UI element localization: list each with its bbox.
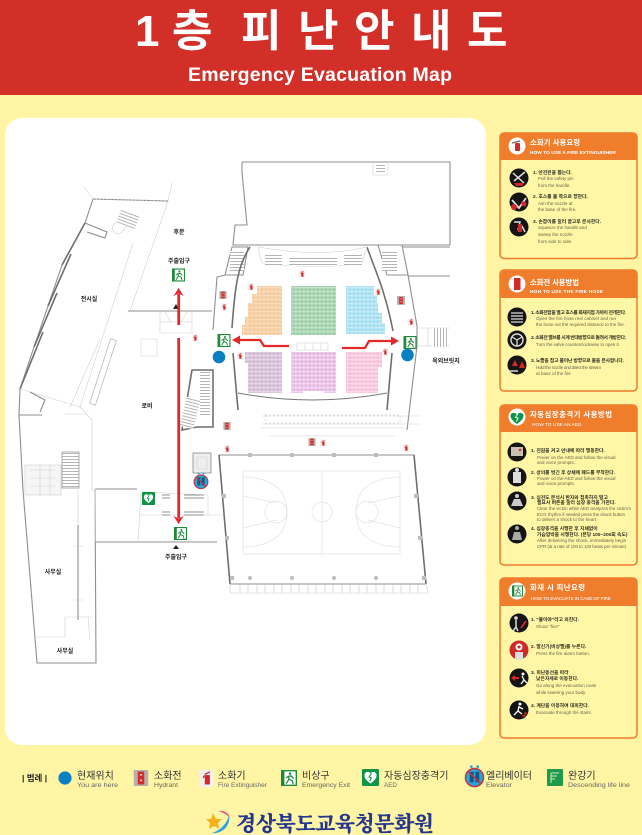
legend: emergency exit: Emergency Exit: [302, 783, 350, 789]
heading: 소화기 사용요령: [530, 138, 580, 147]
label: lobby: 로비: [141, 402, 153, 410]
steps text: Aim the nozzle at: [538, 201, 573, 206]
steps text: ECG rhythm if needed press the shock button: [537, 512, 625, 517]
legend: AED: [362, 769, 448, 789]
steps text: 1. 안전핀을 뽑는다.: [533, 169, 572, 176]
legend: [22, 765, 631, 789]
label: exhibition hall: 전시실: [81, 295, 97, 303]
seat block A: [242, 286, 282, 335]
label: office 2: 사무실: [57, 647, 73, 655]
elevator marker: [194, 472, 208, 489]
evacuation arrow: to rear entrance: [174, 288, 184, 325]
step icons: [510, 168, 528, 236]
legend: extinguisher: 소화기: [218, 770, 246, 782]
seat block D: [245, 352, 282, 393]
title: 1층 피난안내도: [135, 7, 507, 56]
legend: hydrant: Hydrant: [154, 783, 178, 789]
steps text: 2. 호스를 불 쪽으로 향한다.: [533, 193, 588, 200]
AED marker: [142, 492, 155, 505]
steps text: 1. 전원을 켜고 안내에 따라 행동한다.: [531, 447, 605, 454]
steps text: Hold the nozzle and direct the stream: [536, 365, 601, 370]
hydrant markers: [219, 291, 405, 446]
legend: extinguisher: Fire Extinguisher: [218, 783, 267, 789]
subheading: HOW TO EVACUATE IN CASE OF FIRE: [531, 596, 611, 602]
steps text: 낮은자세로 이동한다.: [536, 675, 578, 682]
icon: exit person: [508, 582, 526, 600]
label: main entrance top: 주출입구: [168, 257, 191, 265]
steps text: [533, 169, 601, 244]
outdoor bridge: [418, 328, 460, 365]
label: main entrance bottom: 주출입구: [165, 553, 188, 561]
steps text: 3. 피난동선을 따라: [531, 669, 569, 676]
heading: 소화전 사용방법: [530, 278, 579, 287]
stage front row: [260, 428, 405, 436]
legend: hydrant: 소화전: [154, 770, 182, 782]
panel: fire hose: [500, 270, 637, 391]
steps text: 1. "불이야"라고 외친다.: [531, 616, 579, 623]
steps text: from the handle.: [538, 183, 571, 188]
legend: elevator: Elevator: [486, 783, 512, 789]
steps text: Press the fire alarm button.: [536, 651, 590, 656]
heading: 자동심장충격기 사용방법: [530, 410, 612, 419]
legend: you are here: [58, 769, 119, 789]
you are here: right: [401, 349, 414, 361]
panel: AED: [500, 405, 637, 565]
you are here: left: [213, 351, 225, 363]
evacuation arrow: left exit: [232, 336, 289, 346]
steps text: at base of the fire: [536, 371, 571, 376]
label: back gate: 후문: [173, 228, 185, 236]
steps text: [531, 309, 626, 376]
panel: floor plan: [5, 118, 486, 745]
steps text: CPR (at a rate of 100 to 120 beats per minute): [537, 544, 626, 549]
steps text: Go along the evacuation route: [536, 683, 597, 688]
steps text: Squeeze the handle and: [538, 225, 587, 230]
legend title: | 범례 |: [22, 773, 47, 783]
steps text: 필요시 버튼을 눌러 심장 충격을 가한다.: [537, 499, 616, 506]
legend: descending life line: 완강기: [568, 770, 596, 782]
steps text: [531, 447, 632, 549]
legend: elevator: [465, 765, 532, 789]
legend: emergency exit: 비상구: [302, 770, 330, 782]
heading: 화재 시 피난요령: [530, 583, 585, 592]
steps text: 2. 발신기(비상벨)를 누른다.: [531, 643, 586, 650]
steps text: Turn the valve counterclockwise to open it.: [536, 342, 620, 347]
subheading: HOW TO USE A FIRE EXTINGUISHER: [530, 150, 617, 156]
panel: fire extinguisher: [500, 133, 637, 258]
legend: descending life line: Descending life line: [568, 783, 631, 789]
header banner: [0, 0, 642, 95]
seat block B: [291, 286, 336, 335]
logo mark: [206, 811, 230, 833]
steps text: After delivering the shock, immediately begin: [537, 538, 627, 543]
legend: you are here: You are here: [77, 783, 119, 789]
legend: emergency exit: [281, 770, 350, 789]
legend: elevator: 엘리베이터: [486, 769, 532, 782]
subheading: HOW TO USE AN AED: [532, 422, 582, 428]
legend: you are here: 현재위치: [77, 769, 114, 782]
exit sign: left: [218, 334, 230, 347]
seat block E: [291, 352, 336, 393]
steps text: the base of the fire.: [538, 207, 577, 212]
legend: AED: 자동심장충격기: [384, 769, 448, 782]
steps text: 3. 손잡이를 눌러 골고루 분사한다.: [533, 218, 601, 225]
steps text: Clear the victim while AED analyzes the victim's: [537, 506, 632, 511]
steps text: 1. 소화전함을 열고 호스를 화재지점 가까이 전개한다.: [531, 309, 626, 316]
steps text: 3. 심전도 분석시 환자와 접촉하지 말고: [531, 494, 608, 501]
exit sign: right: [404, 336, 416, 349]
extinguisher markers: [192, 270, 414, 453]
steps text: sweep the nozzle: [538, 232, 573, 237]
steps text: Power on the AED and follow the visual: [537, 455, 616, 460]
steps text: from side to side.: [538, 239, 572, 244]
steps text: and voice prompts.: [537, 460, 575, 465]
label: outdoor bridge: 옥외브릿지: [432, 357, 460, 365]
label: office 1: 사무실: [45, 568, 61, 576]
steps text: [531, 616, 597, 715]
steps text: 4. 심장충격을 시행한 후 지체없이: [531, 525, 598, 532]
step icons: [510, 614, 528, 720]
subtitle: Emergency Evacuation Map: [188, 64, 452, 86]
legend: AED: AED: [384, 783, 398, 789]
steps text: Open the fire hose reel cabinet and run: [536, 316, 616, 321]
evacuation arrow: right exit: [342, 336, 399, 348]
step icons: [508, 442, 526, 544]
legend: hydrant: [134, 770, 182, 789]
steps text: while lowering your body.: [536, 690, 586, 695]
steps text: 4. 계단을 이용하여 대피한다.: [531, 702, 589, 709]
balcony seats: [265, 255, 362, 266]
icon: AED heart: [508, 408, 526, 426]
seat block F: [346, 352, 382, 393]
steps text: 가슴압박을 시행한다. (분당 100~200회 속도): [537, 531, 628, 538]
exhibition wing: [19, 183, 172, 490]
seat block C: [346, 286, 385, 334]
icon: extinguisher: [508, 138, 526, 154]
steps text: 2. 소화전 밸브를 시계 반대방향으로 돌려서 개방한다.: [531, 334, 626, 341]
office wing: [19, 415, 96, 663]
auditorium: [213, 162, 450, 430]
steps text: Evacuate through the stairs.: [536, 710, 592, 715]
step icons: [508, 308, 526, 374]
steps text: Power on the AED and follow the visual: [537, 476, 616, 481]
legend: extinguisher: [200, 770, 267, 789]
steps text: 3. 노즐을 잡고 불이난 방향으로 물을 분사합니다.: [531, 357, 624, 364]
steps text: Shout "fire!": [536, 624, 560, 629]
evacuation arrow: to front entrance: [174, 338, 184, 524]
steps text: the hose out the required distance to the fire.: [536, 322, 625, 327]
steps text: 2. 상의를 벗긴 후 상체에 패드를 부착한다.: [531, 469, 615, 476]
panel: evacuation: [500, 578, 637, 738]
steps text: Pull the safety pin: [538, 176, 574, 181]
legend: descending life line: [547, 769, 631, 789]
icon: hydrant: [508, 276, 526, 292]
steps text: to deliver a shock to the heart.: [537, 517, 597, 522]
organisation logo: [206, 808, 434, 835]
subheading: HOH TO USE THE FIRE HOSE: [530, 289, 604, 295]
exit sign: top: [172, 268, 185, 282]
exit sign: bottom: [174, 527, 187, 540]
steps text: and voice prompts.: [537, 481, 575, 486]
gymnasium: [219, 428, 428, 593]
lobby: [95, 228, 223, 561]
